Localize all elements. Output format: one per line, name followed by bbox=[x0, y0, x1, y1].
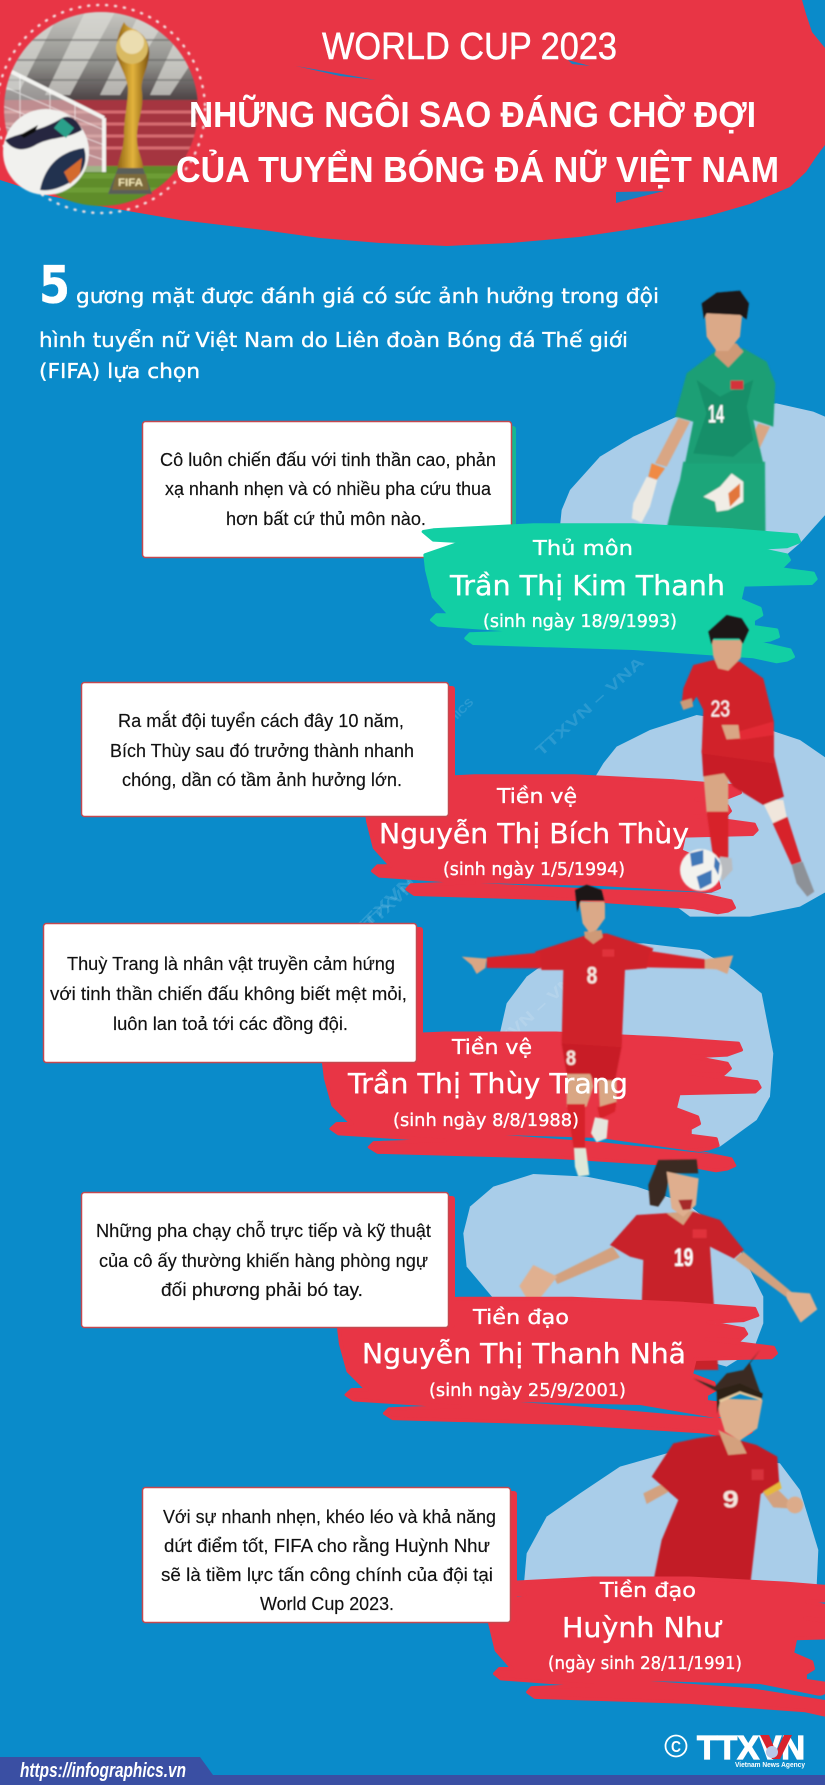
quote card 4: đối phương phải bó tay. bbox=[161, 1280, 363, 1300]
name text: Huỳnh Như bbox=[548, 1578, 742, 1674]
title: WORLD CUP 2023 bbox=[322, 26, 617, 68]
name band: Trần Thị Kim Thanh bbox=[423, 525, 816, 662]
intro text: 5 bbox=[39, 256, 70, 316]
name band: Trần Thị Kim Thanh: Thủ môn bbox=[532, 536, 633, 560]
quote card 2 bbox=[82, 682, 455, 817]
player 1: goalkeeper: 14 bbox=[708, 401, 724, 429]
name band: Trần Thị Kim Thanh: Trần Thị Kim Thanh bbox=[449, 569, 725, 602]
watermarks: TTXVN – VNA bbox=[476, 963, 588, 1066]
name text: Huỳnh Như: Tiền đạo bbox=[599, 1578, 696, 1602]
quote card 3: với tinh thần chiến đấu không biết mệt mỏi, bbox=[50, 984, 407, 1004]
player 5: Huỳnh Như: 9 bbox=[723, 1486, 739, 1513]
name band: Huỳnh Như bbox=[487, 1578, 825, 1716]
title: NHỮNG NGÔI SAO ĐÁNG CHỜ ĐỢI bbox=[189, 93, 756, 135]
player 5: Huỳnh Như bbox=[643, 1350, 803, 1582]
intro text: gương mặt được đánh giá có sức ảnh hưởng trong đội bbox=[76, 284, 659, 308]
title bbox=[176, 26, 779, 190]
quote card 4 bbox=[82, 1192, 455, 1328]
quote card 5: sẽ là tiềm lực tấn công chính của đội tại bbox=[161, 1565, 493, 1585]
intro text: hình tuyển nữ Việt Nam do Liên đoàn Bóng đá Thế giới bbox=[39, 328, 628, 352]
header photo: trophy and ball bbox=[0, 5, 205, 213]
quote card 5: Với sự nhanh nhẹn, khéo léo và khả năng bbox=[163, 1507, 496, 1527]
watermarks: INFOGRAPHICS bbox=[527, 835, 594, 897]
quote card 2: chóng, dần có tầm ảnh hưởng lớn. bbox=[122, 770, 402, 790]
watermarks: TTXVN – VNA bbox=[361, 835, 464, 933]
name text: Nguyễn Thị Thanh Nhã: Nguyễn Thị Thanh Nhã bbox=[362, 1337, 686, 1370]
quote card 4: của cô ấy thường khiến hàng phòng ngự bbox=[99, 1251, 428, 1271]
player 3: Thùy Trang: 8 bbox=[566, 1046, 576, 1070]
TTXVN logo: TTXVN bbox=[697, 1729, 805, 1766]
quote card 1: hơn bất cứ thủ môn nào. bbox=[226, 509, 426, 529]
name text: Huỳnh Như: (ngày sinh 28/11/1991) bbox=[548, 1653, 742, 1674]
name band: Nguyễn Thị Thanh Nhã bbox=[337, 1298, 776, 1437]
background blobs bbox=[463, 403, 825, 1587]
quote card 2: Ra mắt đội tuyển cách đây 10 năm, bbox=[118, 710, 404, 731]
intro text bbox=[39, 256, 659, 383]
TTXVN logo: C bbox=[671, 1739, 681, 1756]
name text: Nguyễn Thị Bích Thùy bbox=[379, 784, 689, 880]
name text: Nguyễn Thị Bích Thùy: (sinh ngày 1/5/1994) bbox=[443, 859, 625, 880]
quote card 5: World Cup 2023. bbox=[260, 1594, 394, 1614]
watermarks bbox=[344, 654, 648, 1109]
quote card 4: Những pha chạy chỗ trực tiếp và kỹ thuật bbox=[96, 1220, 431, 1241]
player 1: goalkeeper bbox=[632, 291, 775, 550]
quote card 2: Bích Thùy sau đó trưởng thành nhanh bbox=[110, 741, 414, 761]
name text: Nguyễn Thị Bích Thùy: Nguyễn Thị Bích Thùy bbox=[379, 817, 689, 850]
player 3: Thùy Trang bbox=[462, 885, 733, 1177]
player 2: Bích Thùy: 23 bbox=[711, 696, 730, 722]
name text: Nguyễn Thị Thanh Nhã: Tiền đạo bbox=[472, 1305, 569, 1329]
football bbox=[3, 109, 89, 195]
player 2: Bích Thùy bbox=[680, 615, 814, 897]
quote card 3 bbox=[44, 924, 423, 1063]
name text: Trần Thị Thùy Trang: (sinh ngày 8/8/1988) bbox=[393, 1110, 579, 1131]
TTXVN logo: Vietnam News Agency bbox=[735, 1760, 806, 1769]
name band: Nguyễn Thị Bích Thùy bbox=[364, 776, 757, 913]
intro text: (FIFA) lựa chọn bbox=[39, 359, 200, 383]
quote card 5: dứt điểm tốt, FIFA cho rằng Huỳnh Như bbox=[164, 1535, 490, 1556]
player 4: Thanh Nhã bbox=[519, 1159, 817, 1370]
trophy: FIFA bbox=[118, 177, 143, 189]
name text: Nguyễn Thị Thanh Nhã bbox=[362, 1305, 686, 1401]
watermarks: INFOGRAPHICS bbox=[401, 696, 476, 772]
trophy bbox=[108, 22, 152, 194]
watermarks: TTXVN – VNA bbox=[532, 654, 648, 760]
player 4: Thanh Nhã: 19 bbox=[674, 1244, 693, 1272]
name text: Nguyễn Thị Thanh Nhã: (sinh ngày 25/9/2001) bbox=[429, 1380, 626, 1401]
quote card 1: Cô luôn chiến đấu với tinh thần cao, phản bbox=[160, 450, 496, 470]
watermarks: TTXVN bbox=[349, 872, 417, 941]
watermarks: INFOGRAPHICS bbox=[344, 1010, 416, 1082]
player 3: Thùy Trang: 8 bbox=[587, 962, 597, 989]
quote card 3: Thuỳ Trang là nhân vật truyền cảm hứng bbox=[67, 954, 395, 974]
watermarks: INFOGRAPHICS bbox=[567, 1037, 639, 1109]
footer bar with url bbox=[0, 1757, 825, 1785]
name text: Nguyễn Thị Bích Thùy: Tiền vệ bbox=[496, 784, 577, 808]
header red splash bbox=[0, 0, 825, 246]
name text: Trần Thị Thùy Trang: Tiền vệ bbox=[451, 1035, 532, 1059]
name band: Trần Thị Thùy Trang bbox=[322, 1033, 760, 1171]
quote card 1 bbox=[142, 422, 516, 558]
title: CỦA TUYỂN BÓNG ĐÁ NỮ VIỆT NAM bbox=[176, 148, 779, 190]
quote card 3: luôn lan toả tới các đồng đội. bbox=[113, 1014, 348, 1034]
name text: Trần Thị Thùy Trang: Trần Thị Thùy Trang bbox=[347, 1067, 628, 1100]
quote card 5 bbox=[142, 1488, 517, 1623]
name text: Trần Thị Thùy Trang bbox=[347, 1035, 628, 1131]
name band: Trần Thị Kim Thanh: (sinh ngày 18/9/1993) bbox=[483, 611, 677, 632]
quote card 1: xạ nhanh nhẹn và có nhiều pha cứu thua bbox=[165, 479, 492, 499]
footer bar with url: https://infographics.vn bbox=[20, 1760, 186, 1782]
name text: Huỳnh Như: Huỳnh Như bbox=[562, 1611, 722, 1644]
